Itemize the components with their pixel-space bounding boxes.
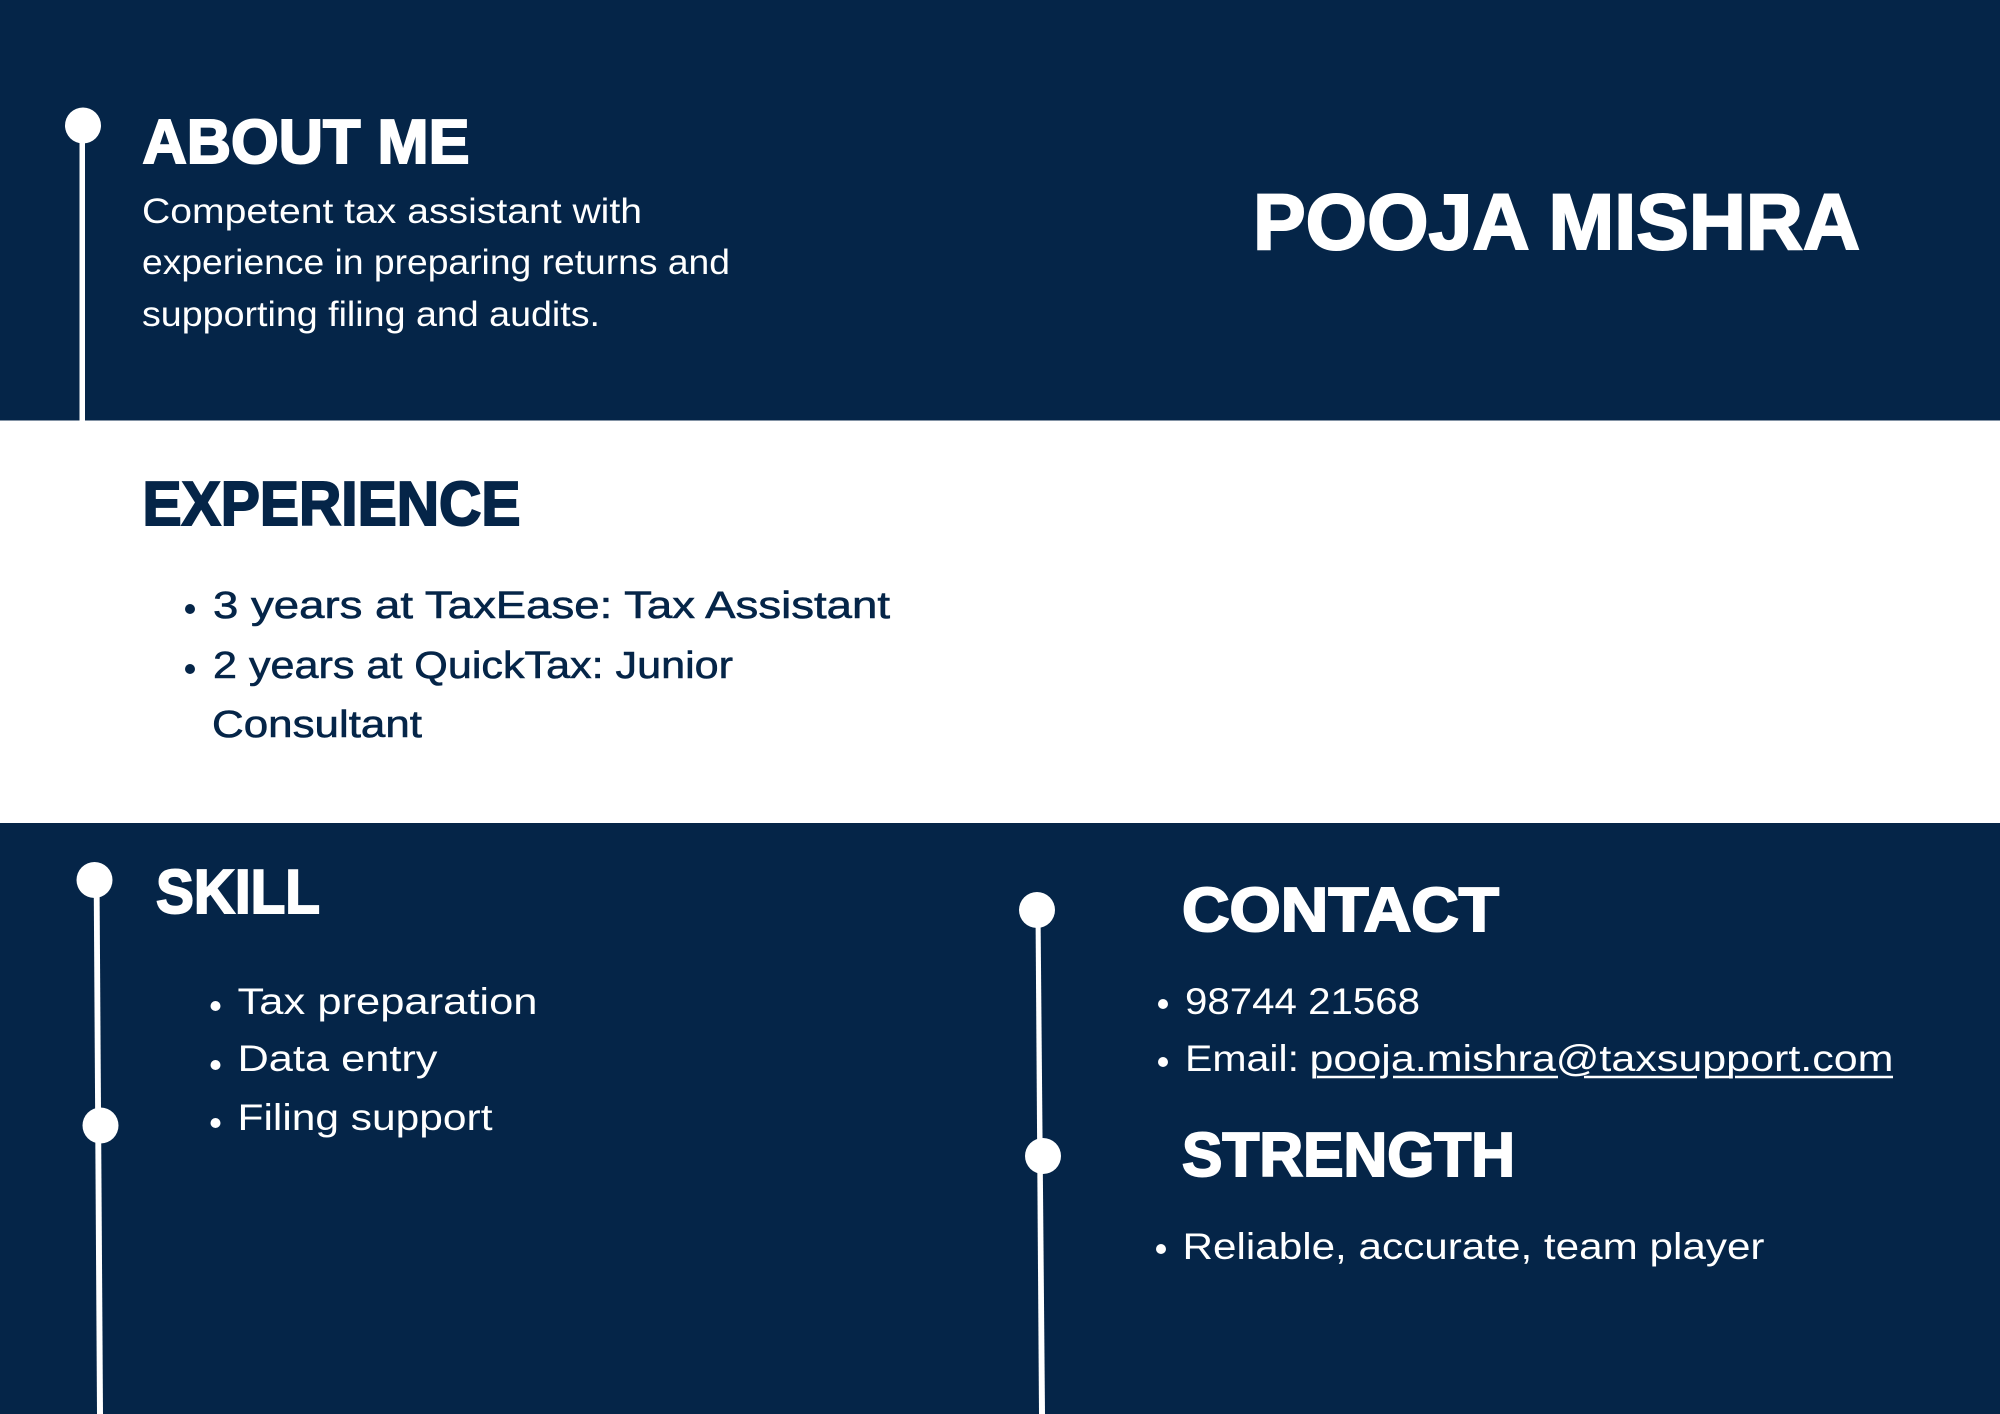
timeline: contact and strength [1019, 892, 1061, 1414]
list: experience items: 2 years at QuickTax: Junior [213, 645, 733, 687]
text block: about me [142, 192, 730, 334]
title: name: POOJA MISHRA [1253, 177, 1860, 266]
list: skills: Tax preparation [238, 981, 538, 1022]
list: skills: Data entry [238, 1038, 438, 1079]
heading: contact: CONTACT [1182, 876, 1499, 945]
list: contact details: pooja.mishra@taxsupport.com [1310, 1038, 1894, 1079]
panel: top header band [0, 0, 2000, 421]
list: contact details: 98744 21568 [1185, 981, 1420, 1022]
panel: experience [0, 420, 2000, 823]
list: contact details: Email: [1185, 1038, 1299, 1079]
text block: about me: experience in preparing returns and [142, 243, 730, 282]
list: contact details [1158, 981, 1894, 1079]
heading: experience: EXPERIENCE [142, 470, 520, 539]
list: skills: Filing support [238, 1097, 493, 1138]
panel: bottom band [0, 823, 2000, 1414]
text block: about me: supporting filing and audits. [142, 295, 600, 334]
list: skills [210, 981, 538, 1138]
timeline: skill [76, 862, 118, 1414]
timeline: about me [65, 108, 101, 421]
heading: strength: STRENGTH [1182, 1121, 1515, 1190]
heading: skill: SKILL [156, 858, 320, 927]
heading: about me: ABOUT ME [142, 108, 470, 177]
list: experience items: 3 years at TaxEase: Tax Assistant [213, 585, 891, 627]
list: experience items [185, 585, 891, 746]
list: strengths: Reliable, accurate, team player [1182, 1226, 1764, 1267]
text block: about me: Competent tax assistant with [142, 192, 642, 231]
list: experience items: Consultant [212, 704, 423, 746]
